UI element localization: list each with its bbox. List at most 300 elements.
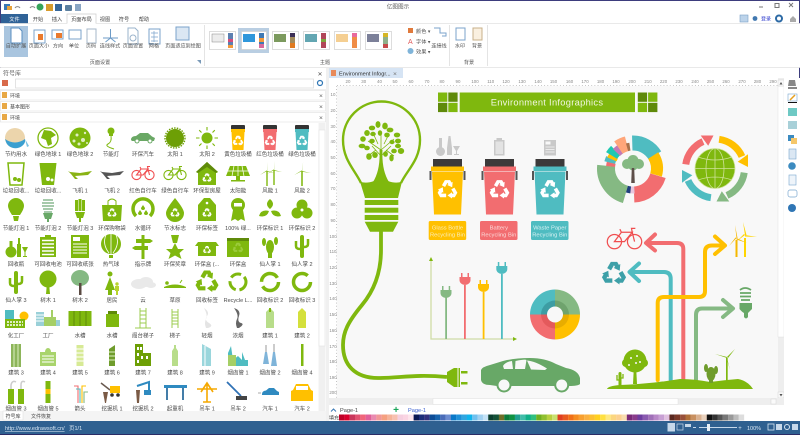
icon: gantry [164,385,187,412]
ribbon group: themes: 主题 [320,59,330,66]
icon: residents [105,272,119,304]
panel: symbol library: 环境 [10,92,20,100]
left ruler: 140 [329,296,337,301]
icon: recycle mark 2: 回收标识 2 [257,296,283,304]
label [429,221,466,240]
top ruler: 90 [456,79,461,84]
top ruler: 200 [628,79,636,84]
icon: eco mark 2 [289,200,315,232]
icon: platform ladder: 阁台梯子 [132,332,154,340]
icon: chimney 5 [37,381,59,412]
globe [695,148,735,188]
bin [532,159,568,214]
ribbon group: themes [210,28,392,66]
icon: sun 1: 太阳 1 [167,150,183,158]
icon: crane 1: 吊车 1 [199,404,215,412]
top ruler [329,78,778,86]
paper icon [544,140,556,156]
banner title: Environment Infographics [491,98,603,108]
icon: bulb 2 [35,200,61,232]
icon: eco medal: 环保奖章 [164,260,186,268]
icon: energy-saving lamp [103,128,120,158]
icon: eco box open [195,242,220,268]
left ruler: 130 [329,281,337,286]
icon: cactus 3 [5,271,27,304]
plug: red [460,273,470,339]
icon: 100 percent badge [225,198,251,232]
icon: chimney 2: 烟囱管 2 [259,368,281,376]
panel: symbol library: 符号库 [3,70,21,78]
app title: 亿图图示 [387,2,410,10]
icon: green earth 2: 绿色地球 2 [67,150,93,158]
icon: hot-air balloon: 热气球 [103,260,120,268]
energy saving bulb [740,288,752,318]
battery icon [494,138,504,156]
icon: cactus 2: 仙人掌 2 [291,260,313,268]
fill colour palette: 填充 [329,414,339,422]
bulb base [360,181,402,232]
label: Glass Bottle [432,226,463,232]
icon: 100 percent badge: 100% 绿... [225,224,251,232]
top ruler: 30 [361,79,367,84]
top ruler: 110 [487,79,495,84]
left ruler: 50 [331,155,336,160]
ground scene [607,349,753,389]
top ruler: 70 [425,79,430,84]
ribbon group: page settings: 页面设置 [90,59,110,66]
axis arrowheads [429,257,517,341]
icon: tree 2 [71,270,89,304]
quick access toolbar [4,4,81,11]
ribbon group: background: 水印 [455,42,465,50]
arrow: green [682,135,748,202]
icon: yellow bin [224,125,252,158]
icon: bulb 1 [3,198,29,232]
icon: factory [36,310,60,340]
top ruler: 130 [518,79,526,84]
icon: eco tag [196,198,218,232]
icon: building 2: 建筑 2 [294,332,310,340]
left ruler: 110 [330,249,337,254]
ribbon group: colour, font, effects [408,27,447,56]
icon: red bike: 红色自行车 [129,186,157,194]
icon: chimney 1 [227,346,249,376]
arrow: yellow to turbines [658,236,725,380]
bin [430,159,466,214]
ribbon tabs: 插入 [52,15,62,23]
icon: eco mark 1 [257,199,283,232]
ground [607,379,753,389]
left ruler: 80 [331,202,336,207]
top ruler: 230 [675,79,683,84]
top ruler: 140 [534,79,542,84]
icon: sun 1 [165,128,185,158]
left ruler: 190 [329,375,337,380]
icon: building 7 [135,344,151,376]
ribbon group: page settings: 单位 [69,42,79,50]
plug: teal [496,262,507,339]
arrow: red [682,135,748,202]
view controls [668,423,798,432]
ribbon group: page settings: 网格 [149,42,159,50]
ribbon group: colour, font, effects: 连接线 [431,42,447,50]
battery recycling bin [480,138,518,240]
icon: eco house: 环保型房屋 [193,186,221,194]
icon: eco tag: 环保标签 [196,224,218,232]
icon: recycle can outline: 垃圾回收... [3,186,30,194]
small cactus [617,372,623,386]
icon: eco box [227,238,249,268]
row 7 icons [8,344,313,376]
icon: recycle can solid [35,163,62,194]
top ruler: 290 [769,79,777,84]
top ruler: 160 [566,79,574,84]
icon: eco house [193,162,221,194]
top ruler: 80 [440,79,445,84]
view controls: 100% [747,426,761,432]
icon: chimney 2 [259,344,281,376]
status bar [0,421,800,435]
right squares [638,92,657,112]
icon: building 1: 建筑 1 [262,332,278,340]
icon: chimney 1: 烟囱管 1 [227,368,249,376]
document tab strip: ✕ [393,72,397,78]
icon: plane 1: 飞机 1 [72,186,88,194]
icon: tree 1: 树木 1 [40,296,56,304]
ribbon group: background: 背景 [464,59,474,66]
ribbon group: page settings: 页面适应到绘图 [165,42,201,50]
icon: solar panel: 太阳能 [230,186,247,194]
icon: cloud: 云 [140,297,146,304]
icon: building 3 [8,344,24,376]
light bulb with tree and cord [343,102,468,387]
top ruler: 170 [581,79,589,84]
label [531,221,568,240]
account icons [740,15,796,22]
cord [343,231,447,378]
right toolbar [784,78,800,421]
icon: tank [68,311,92,340]
icon: cactus 2 [291,235,313,268]
left ruler: 200 [329,390,337,395]
globe with cycle arrows [682,135,748,202]
icon: residents: 居民 [106,297,118,304]
icon: battery: 可回收电池 [34,260,62,268]
top ruler: 60 [409,79,414,84]
icon: arrows: 箭头 [74,404,86,412]
icon: green earth 2 [67,128,93,158]
icon: recycle mark 3: 回收标识 3 [289,296,315,304]
icon: building 8: 建筑 8 [167,368,183,376]
icon: building 5 [72,345,88,376]
tab: file [1,14,28,24]
icon: chimney 4: 烟囱管 4 [291,368,313,376]
icon: building 9: 建筑 9 [199,368,215,376]
icon: eco medal [164,235,186,268]
icon: green earth 1 [35,128,61,158]
icon: blue car: 汽车 1 [262,404,278,412]
top ruler: 120 [502,79,510,84]
icon: building 6: 建筑 6 [104,368,120,376]
waste paper recycling bin [531,140,568,240]
plug bar chart [429,257,517,341]
left ruler: 150 [329,312,337,317]
icon: light smoke [201,308,213,340]
icon: light smoke: 轻烟 [201,332,213,340]
top ruler: 50 [393,79,398,84]
icon: green bin: 绿色垃圾桶 [288,150,316,158]
icon: water saving: 节约用水 [5,150,27,158]
panel bottom tabs: 符号库 [5,413,21,420]
tree in bulb [359,121,404,182]
left squares [438,92,458,112]
page tab bar: + [393,405,399,416]
icon: energy-saving lamp: 节能灯 [103,150,120,158]
left ruler: 180 [329,359,337,364]
icon: recycle label [194,270,220,304]
icon: gantry: 起重机 [167,404,184,412]
left ruler: 10 [331,92,336,97]
ribbon group: page settings: 连线样式 [100,42,120,50]
vertical scrollbar [778,78,784,398]
icon: building 3: 建筑 3 [8,368,24,376]
icon: hot-air balloon [101,234,121,268]
icon: building 4: 建筑 4 [40,368,56,376]
icon: bulb 2: 节能灯泡 2 [35,224,61,232]
gap between panel and canvas [326,68,329,421]
arrow: red to bicycle [646,234,683,380]
fill colour palette [329,414,744,422]
ribbon group: page settings: 方向 [53,42,63,50]
green car [481,358,580,392]
wind turbines yellow [729,222,757,257]
axes [431,260,515,339]
icon: tree 1 [40,270,56,304]
top ruler: 220 [660,79,668,84]
icon: green earth 1: 绿色地球 1 [35,150,61,158]
label: Recycling Bin [532,232,567,238]
icon: battery [34,235,62,268]
bin [482,159,518,214]
top ruler: 270 [738,79,746,84]
ribbon tabs: 页面布局 [71,15,92,23]
icon: arrows [74,386,88,412]
icon: water-saving sign [164,198,186,232]
panel: symbol library: 基本图形 [10,104,30,110]
title banner [438,92,657,112]
icon: signpost: 指示牌 [135,260,152,268]
view controls: + [738,426,742,432]
left ruler: 20 [331,108,336,113]
icon: chemical plant: 化工厂 [8,332,25,340]
icon: chimney 4 [291,344,313,376]
icon: plane 1 [68,171,92,194]
top ruler: 240 [691,79,699,84]
top ruler: 250 [707,79,715,84]
ribbon tabs: 视图 [100,15,110,23]
icon: wind 1 [260,161,282,194]
icon: factory: 工厂 [42,332,54,340]
label: Recycling Bin [481,232,516,238]
arrow: teal to recycle [630,264,671,380]
icon: grassland: 草原 [169,296,181,304]
icon: blue car [258,388,279,412]
icon: recycle can solid: 垃圾回收... [35,186,62,194]
left ruler: 70 [331,186,336,191]
turbine green [715,349,735,382]
icon: tank 2 [106,311,119,340]
icon: plane 2 [100,171,124,194]
icon: chimney 5: 烟囱管 5 [37,404,59,412]
icon: recycle mark 3 [289,274,315,304]
icon: recycle can outline [3,163,30,194]
top ruler: 40 [377,79,382,84]
label: Waste Paper [533,226,567,232]
horizontal scrollbar [329,398,784,405]
plug [447,368,468,387]
icon: green bike: 绿色自行车 [161,186,189,194]
ribbon group: page settings [4,26,201,66]
ribbon group: page settings: 页面大小 [29,42,49,50]
icon: green bin [288,125,316,158]
document tab strip: Environment Infogr... [339,72,391,78]
left ruler: 170 [329,344,337,349]
icon: recycling bottles [6,238,28,268]
icon: building 6 [104,345,120,376]
icon: crane 1 [197,383,217,412]
panel: symbol library: ✕ [317,72,323,78]
tree [622,350,648,384]
icon: chimney 3 [5,381,27,412]
account icons: 登录 [761,16,771,22]
icon: yellow bin: 黄色垃圾桶 [224,150,252,158]
status bar: 页1/1 [69,425,82,432]
page tab bar: Page-1 [340,408,358,414]
icon: eco mark 2: 环保标识 2 [289,224,315,232]
icon: eco mark 1: 环保标识 1 [257,224,283,232]
icon: building 8 [167,345,183,376]
bicycle [607,228,642,249]
row 8 icons [5,381,313,412]
donut chart with tree [598,133,668,204]
icon: ladder [169,309,181,340]
left ruler: 120 [329,265,337,270]
ribbon group: colour, font, effects: 颜色 ▾ [416,27,431,35]
arrow: green to bulb [696,300,733,380]
canvas background [337,86,778,398]
window controls [759,3,793,8]
icon: solar panel [226,166,250,194]
icon: ladder: 梯子 [169,332,181,340]
icon: eco box: 环保盒 [230,260,247,268]
icon: wind 2 [294,162,311,194]
panel: symbol library: ✕ [319,116,323,122]
ribbon tabs [33,14,149,24]
icon: recycle label: 回收标签 [196,296,218,304]
label: Recycling Bin [430,232,465,238]
icon: plane 2: 飞机 2 [104,186,120,194]
icon: water cycle: 水循环 [135,224,152,232]
page tab bar [329,405,784,416]
top ruler: 100 [471,79,479,84]
icon: water saving [5,128,29,158]
icon: paper: 可回收纸张 [66,260,94,268]
left ruler [329,86,337,398]
icon: recycle loop: Recycle L... [224,298,253,304]
icon: yellow taxi: 汽车 2 [294,404,310,412]
icon: eco box open: 环保盒 (... [195,260,220,268]
icon: eco bag [98,199,126,232]
icon: dense smoke: 浓烟 [232,332,244,340]
icon: cactus 1 [259,237,281,268]
icon: eco car: 环保汽车 [132,150,154,158]
icon: building 1 [262,308,278,340]
icon: red bin: 红色垃圾桶 [256,150,284,158]
icon: bulb 1: 节能灯泡 1 [3,224,29,232]
tab: file: 文件 [9,15,20,23]
label [480,221,518,240]
icon: water cycle [133,199,153,232]
left ruler: 90 [331,218,336,223]
ribbon tabs: 帮助 [139,15,149,23]
status bar: http://www.edrawsoft.cn/ [5,426,65,432]
icon: platform ladder [132,308,154,340]
icon: dense smoke [232,308,244,340]
icon: yellow taxi [291,384,313,412]
ribbon group: colour, font, effects: 字体 ▾ [416,38,431,46]
label: Battery [490,226,508,232]
row 4 icons [6,234,313,268]
ribbon group: background: 背景 [472,42,482,50]
big cactus [704,364,718,383]
ribbon tabs: 符号 [119,15,129,23]
ribbon tabs: 开始 [33,15,44,23]
row 1 icons [5,125,316,158]
left ruler: 160 [329,328,337,333]
icon: recycle loop [224,274,253,304]
icon: sun 2 [196,127,218,158]
left ruler: 100 [329,234,337,239]
top ruler: 190 [612,79,620,84]
row 3 icons [3,198,315,232]
ribbon group: colour, font, effects: A [408,39,413,46]
bottles icon [436,136,460,156]
icon: crane 2 [227,382,247,412]
icon: sun 2: 太阳 2 [199,150,215,158]
plug: green [440,286,452,339]
left ruler: 60 [331,171,336,176]
panel: symbol library [0,68,326,414]
banner bar [460,92,635,112]
arrow: teal [682,135,748,202]
panel bottom tabs: 文件恢复 [31,413,51,420]
icon: cactus 3: 仙人掌 3 [5,296,27,304]
top ruler: 150 [550,79,558,84]
icon: building 9 [199,344,215,376]
arrow: yellow [682,135,748,202]
icon: chemical plant [5,310,28,340]
tool icons [788,80,797,212]
icon: building 2 [294,308,310,340]
glass bottle recycling bin [429,136,466,240]
icon: red bin [256,125,284,158]
icon: green bike [161,166,189,194]
icon: building 4 [40,348,56,376]
panel: symbol library: ✕ [319,104,323,110]
icon: cactus 1: 仙人掌 1 [259,260,281,268]
icon: excavator 2: 挖掘机 2 [132,404,154,412]
icon: recycling bottles: 回收瓶 [8,260,25,268]
